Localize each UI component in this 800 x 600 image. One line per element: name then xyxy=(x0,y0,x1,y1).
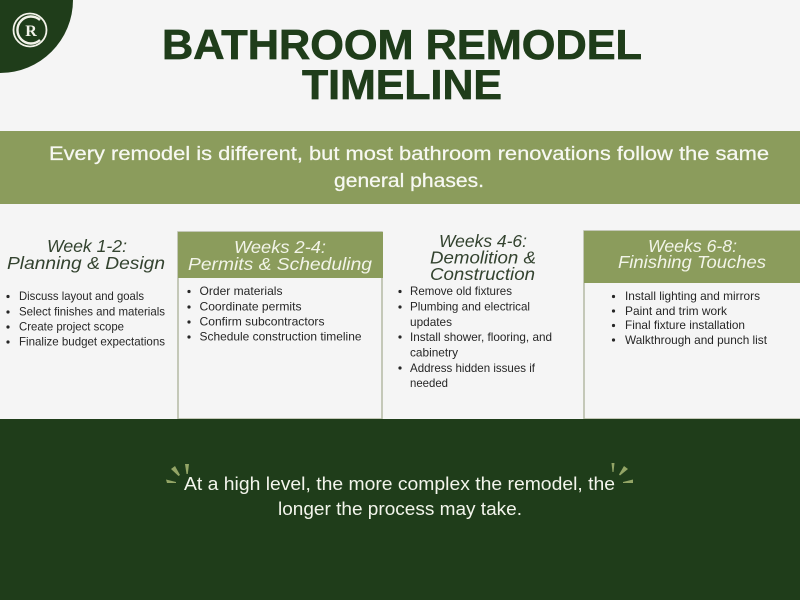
heading: weeks 4-6: Demolition & xyxy=(430,248,536,268)
panel: weeks 4-6 demolition and construction xyxy=(398,231,552,390)
closing statement: At a high level, the more complex the remodel, the xyxy=(184,474,615,494)
icon: left sparkle xyxy=(166,464,189,483)
heading: weeks 4-6: Weeks 4-6: xyxy=(439,231,527,251)
task list: week 1-2: Finalize budget expectations xyxy=(19,334,165,348)
task list: weeks 4-6: updates xyxy=(410,315,452,329)
task list: weeks 4-6: cabinetry xyxy=(410,346,458,360)
task list: weeks 2-4: Confirm subcontractors xyxy=(200,314,325,328)
task list: week 1-2: Create project scope xyxy=(19,320,124,334)
logo badge: R xyxy=(25,23,37,40)
icon: right sparkle xyxy=(612,463,633,483)
task list: weeks 4-6: Remove old fixtures xyxy=(410,284,512,298)
intro banner xyxy=(0,131,800,204)
task list: weeks 6-8: Install lighting and mirrors xyxy=(625,289,760,303)
task list: week 1-2: Select finishes and materials xyxy=(19,304,165,318)
title: TIMELINE xyxy=(302,61,502,108)
closing statement: longer the process may take. xyxy=(278,499,522,519)
heading: weeks 4-6: Construction xyxy=(430,264,535,284)
heading: week 1-2 xyxy=(7,236,165,273)
title xyxy=(162,21,642,108)
heading: weeks 2-4: Weeks 2-4: xyxy=(234,237,326,257)
heading: weeks 2-4: Permits & Scheduling xyxy=(188,254,372,274)
task list: weeks 4-6: needed xyxy=(410,376,448,390)
task list: weeks 4-6: Plumbing and electrical xyxy=(410,300,530,314)
heading: weeks 2-4 xyxy=(178,232,383,278)
task list: weeks 2-4: Order materials xyxy=(200,284,283,298)
task list: weeks 6-8: Final fixture installation xyxy=(625,318,745,332)
task list: weeks 6-8: Paint and trim work xyxy=(625,304,727,318)
task list: weeks 2-4: Schedule construction timeline xyxy=(200,330,362,344)
heading: week 1-2: Planning & Design xyxy=(7,253,165,273)
heading: week 1-2: Week 1-2: xyxy=(47,236,127,256)
heading: weeks 4-6 xyxy=(430,231,536,284)
heading: weeks 6-8 xyxy=(584,231,800,283)
task list: weeks 4-6: Install shower, flooring, and xyxy=(410,330,552,344)
closing statement xyxy=(184,474,615,519)
task list: week 1-2 xyxy=(6,289,165,348)
logo badge xyxy=(0,0,73,73)
task list: weeks 6-8 xyxy=(612,289,768,347)
heading: weeks 6-8: Finishing Touches xyxy=(618,252,766,272)
panel: weeks 6-8 finishing touches xyxy=(584,231,800,419)
title: BATHROOM REMODEL xyxy=(162,21,642,68)
panel: week 1-2 planning and design xyxy=(6,236,165,348)
intro banner: Every remodel is different, but most bathroom renovations follow the same xyxy=(49,144,769,165)
task list: weeks 2-4: Coordinate permits xyxy=(200,300,302,314)
task list: weeks 4-6 xyxy=(398,284,552,390)
task list: week 1-2: Discuss layout and goals xyxy=(19,289,144,303)
closing panel xyxy=(0,419,800,600)
task list: weeks 2-4 xyxy=(187,284,362,344)
task list: weeks 4-6: Address hidden issues if xyxy=(410,361,536,375)
panel: weeks 2-4 permits and scheduling xyxy=(178,232,383,419)
task list: weeks 6-8: Walkthrough and punch list xyxy=(625,333,768,347)
intro banner: general phases. xyxy=(334,171,484,192)
heading: weeks 6-8: Weeks 6-8: xyxy=(648,236,737,256)
